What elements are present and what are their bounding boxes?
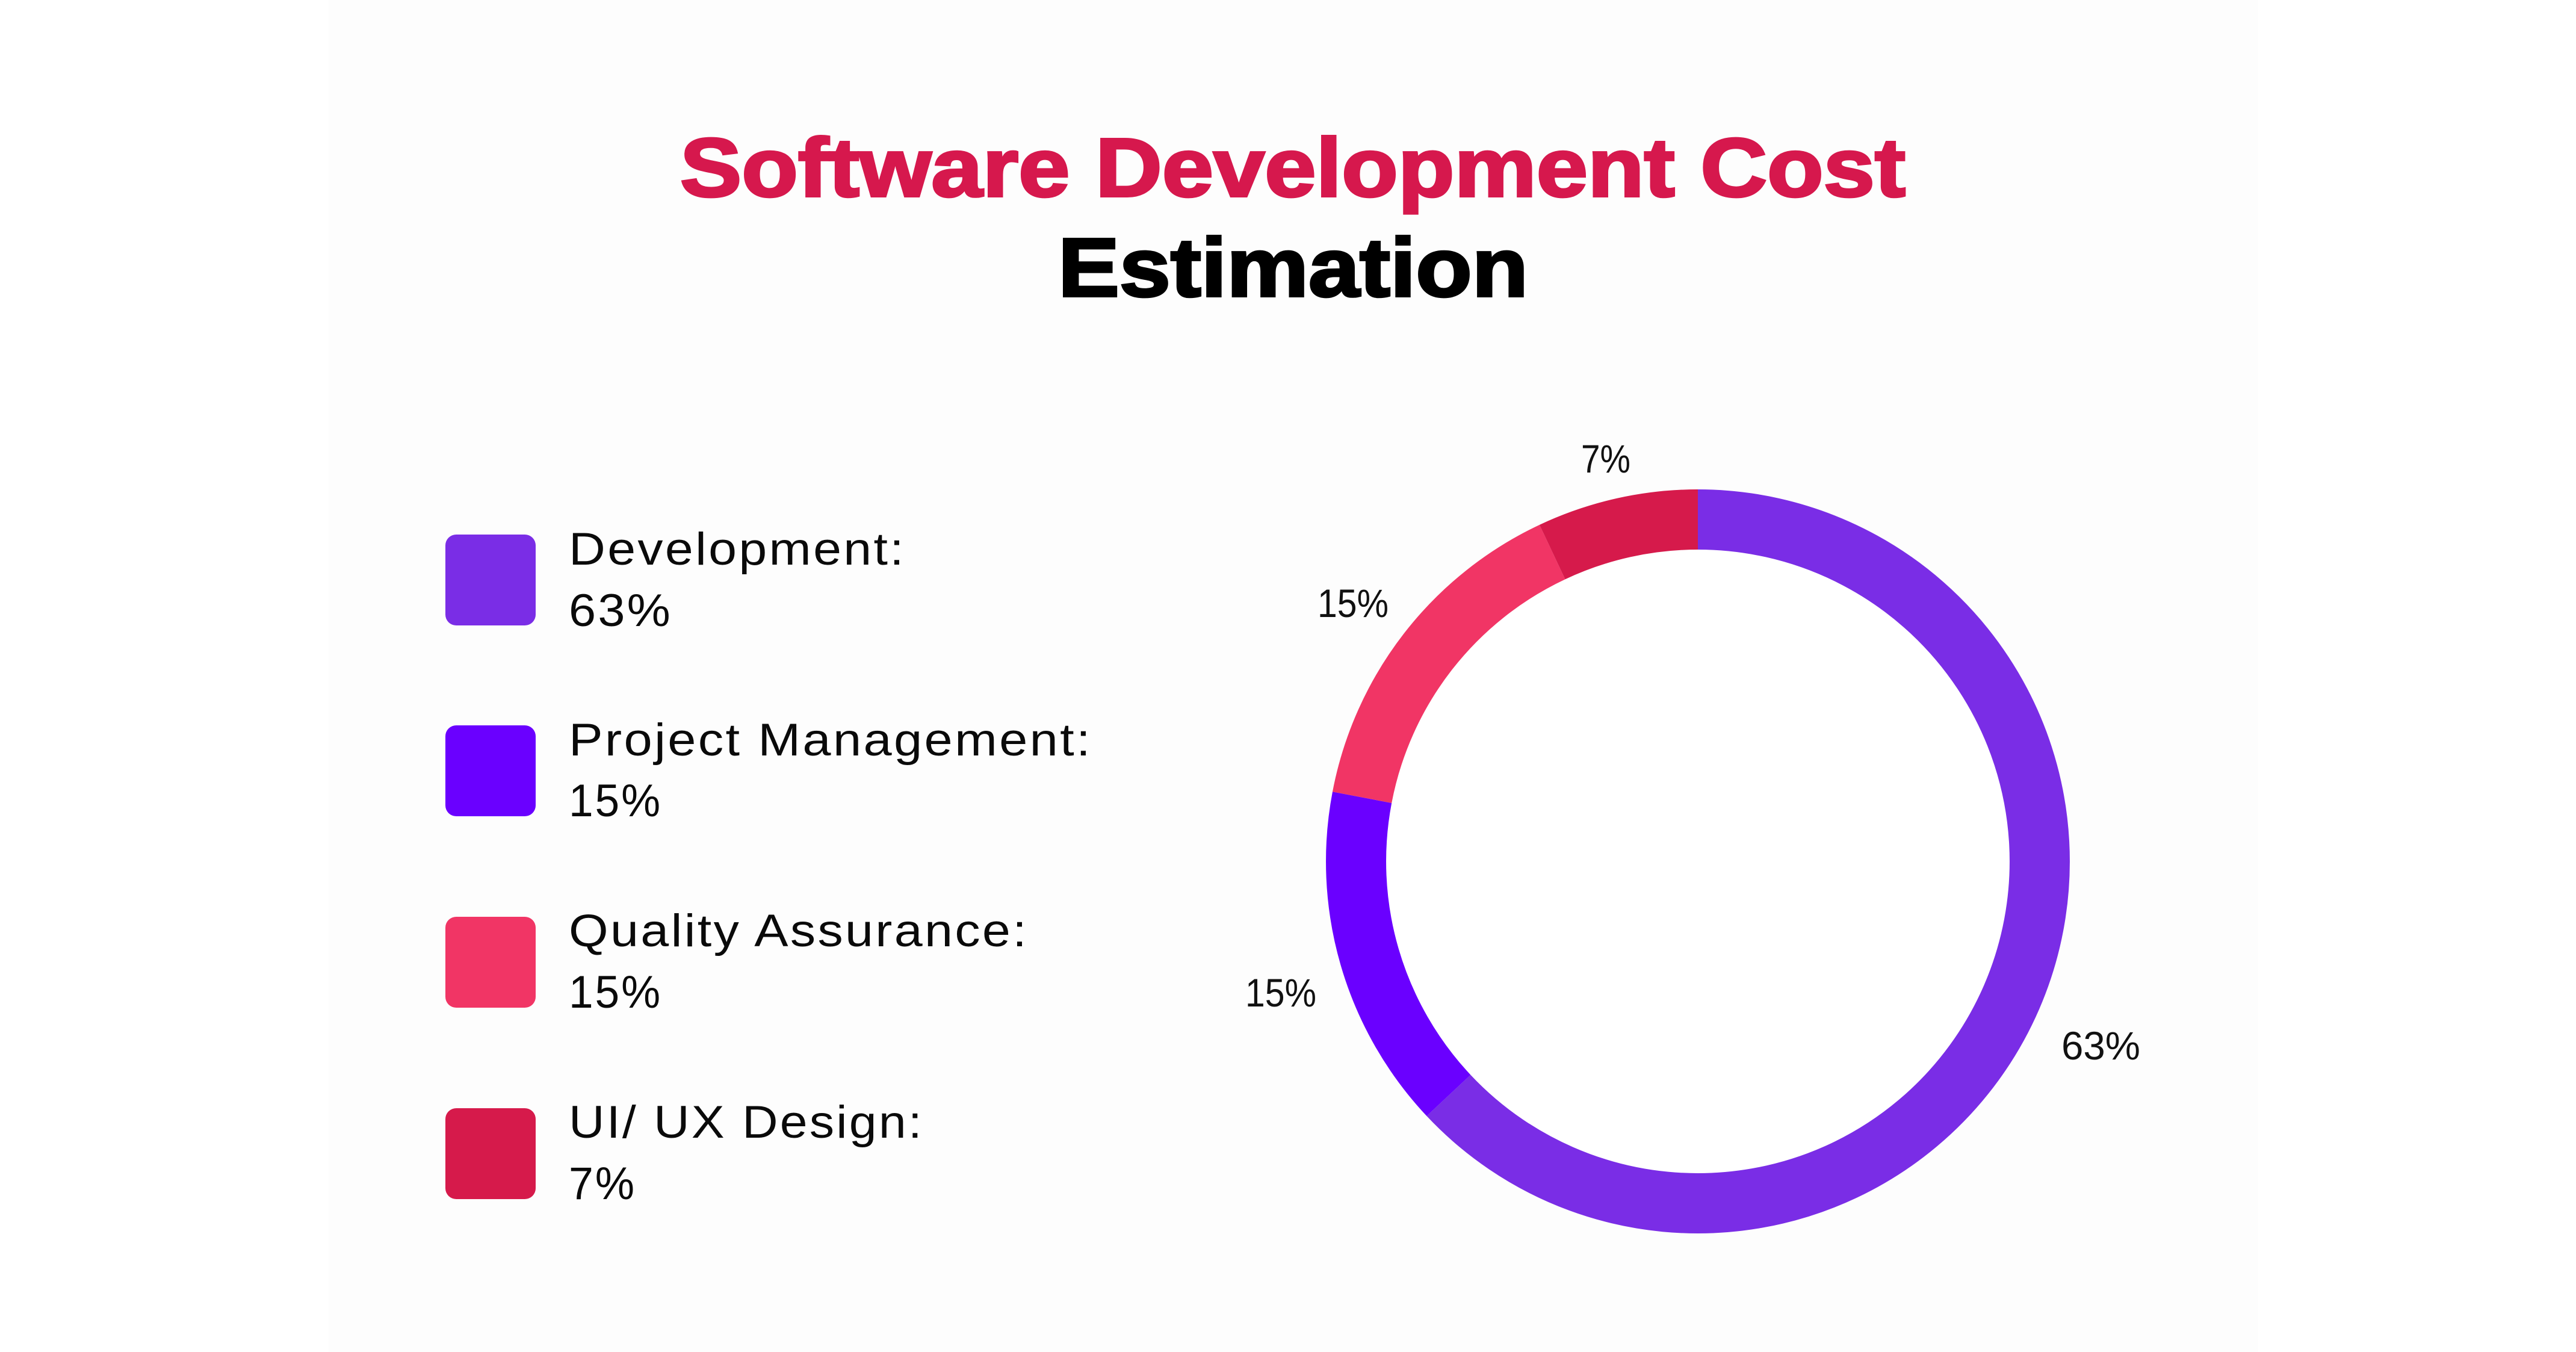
legend item: Project Management: Project Management:	[569, 715, 1092, 766]
legend item: Development	[445, 524, 906, 636]
legend item: UI/ UX Design	[445, 1097, 924, 1209]
segment: Project Management 15%	[1356, 798, 1449, 1096]
segment: Quality Assurance 15%	[1362, 552, 1552, 798]
segment: UI/UX Design 7%	[1552, 519, 1698, 552]
legend item: UI/ UX Design: UI/ UX Design:	[569, 1097, 924, 1148]
title	[680, 122, 1906, 314]
legend item: Quality Assurance: 15%	[569, 967, 662, 1018]
chart label 7%: 7%	[1581, 436, 1630, 481]
background panel	[329, 0, 2258, 1352]
title line 1: Software Development Cost	[680, 122, 1906, 214]
legend	[445, 524, 1092, 1209]
legend item: UI/ UX Design: 7%	[569, 1158, 636, 1209]
legend item: Quality Assurance: Quality Assurance:	[569, 905, 1029, 957]
donut chart	[1356, 519, 2040, 1203]
legend item: Development: Development:	[569, 524, 906, 575]
legend item: Quality Assurance	[445, 905, 1029, 1018]
legend item: Development: 63%	[569, 585, 672, 636]
chart label 15% upper: 15%	[1317, 581, 1389, 625]
legend item: Project Management: 15%	[569, 775, 662, 826]
inner white circle	[1386, 550, 2010, 1173]
segment: Development 63%	[1449, 519, 2040, 1203]
title line 2: Estimation	[1058, 222, 1528, 314]
legend item: Project Management	[445, 715, 1092, 826]
chart label 15% lower: 15%	[1245, 970, 1316, 1015]
chart label 63%: 63%	[2061, 1023, 2140, 1068]
